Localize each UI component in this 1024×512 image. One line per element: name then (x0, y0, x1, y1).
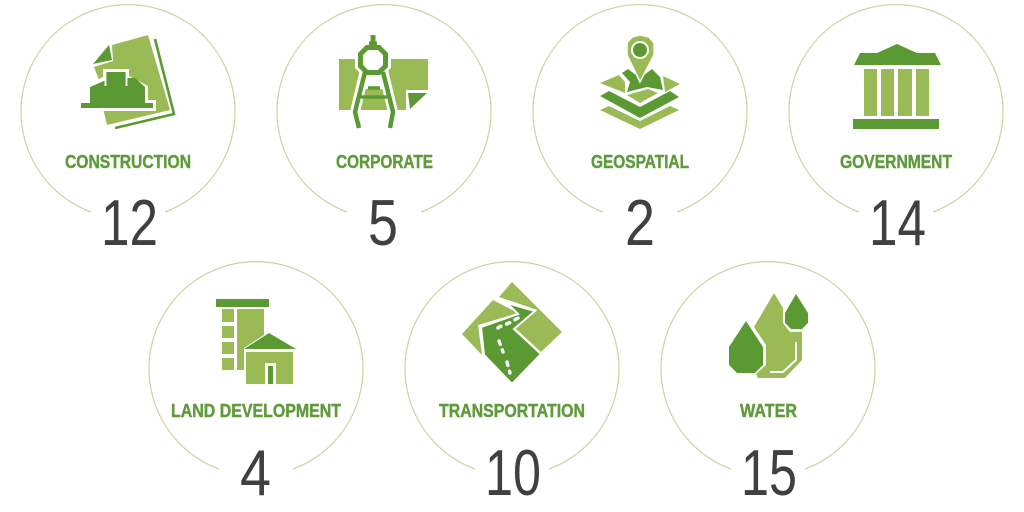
panel: water (661, 262, 875, 509)
label: LAND DEVELOPMENT (171, 401, 341, 421)
circle outline (277, 5, 491, 212)
panel: construction (21, 5, 235, 259)
panel: government (789, 5, 1003, 259)
label: CORPORATE (336, 152, 433, 172)
panel: transportation (405, 262, 619, 509)
count: 4 (240, 436, 271, 509)
circle outline (661, 262, 875, 469)
panel: corporate (277, 5, 491, 259)
panel: land development (149, 262, 363, 509)
circle outline (789, 5, 1003, 212)
count: 5 (368, 186, 398, 259)
circle outline (405, 262, 619, 469)
count: 15 (741, 436, 797, 509)
label: GEOSPATIAL (591, 152, 689, 172)
icon: plans and hard hat (78, 35, 174, 128)
count: 14 (869, 186, 926, 259)
circle outline (149, 262, 363, 469)
icon: winding road on diamond (462, 282, 562, 384)
count: 10 (485, 436, 541, 509)
count: 2 (625, 186, 655, 259)
circle outline (21, 5, 235, 212)
count: 12 (101, 186, 158, 259)
label: TRANSPORTATION (439, 401, 585, 421)
label: CONSTRUCTION (65, 152, 191, 172)
icon: water drops (729, 293, 808, 378)
icon: drafting compass on paper (339, 35, 428, 128)
icon: columned building (853, 44, 941, 129)
label: GOVERNMENT (840, 152, 952, 172)
circle outline (533, 5, 747, 212)
label: WATER (740, 401, 797, 421)
icon: tower and house (216, 299, 296, 384)
panel: geospatial (533, 5, 747, 259)
icon: map pin over layers (600, 35, 680, 129)
